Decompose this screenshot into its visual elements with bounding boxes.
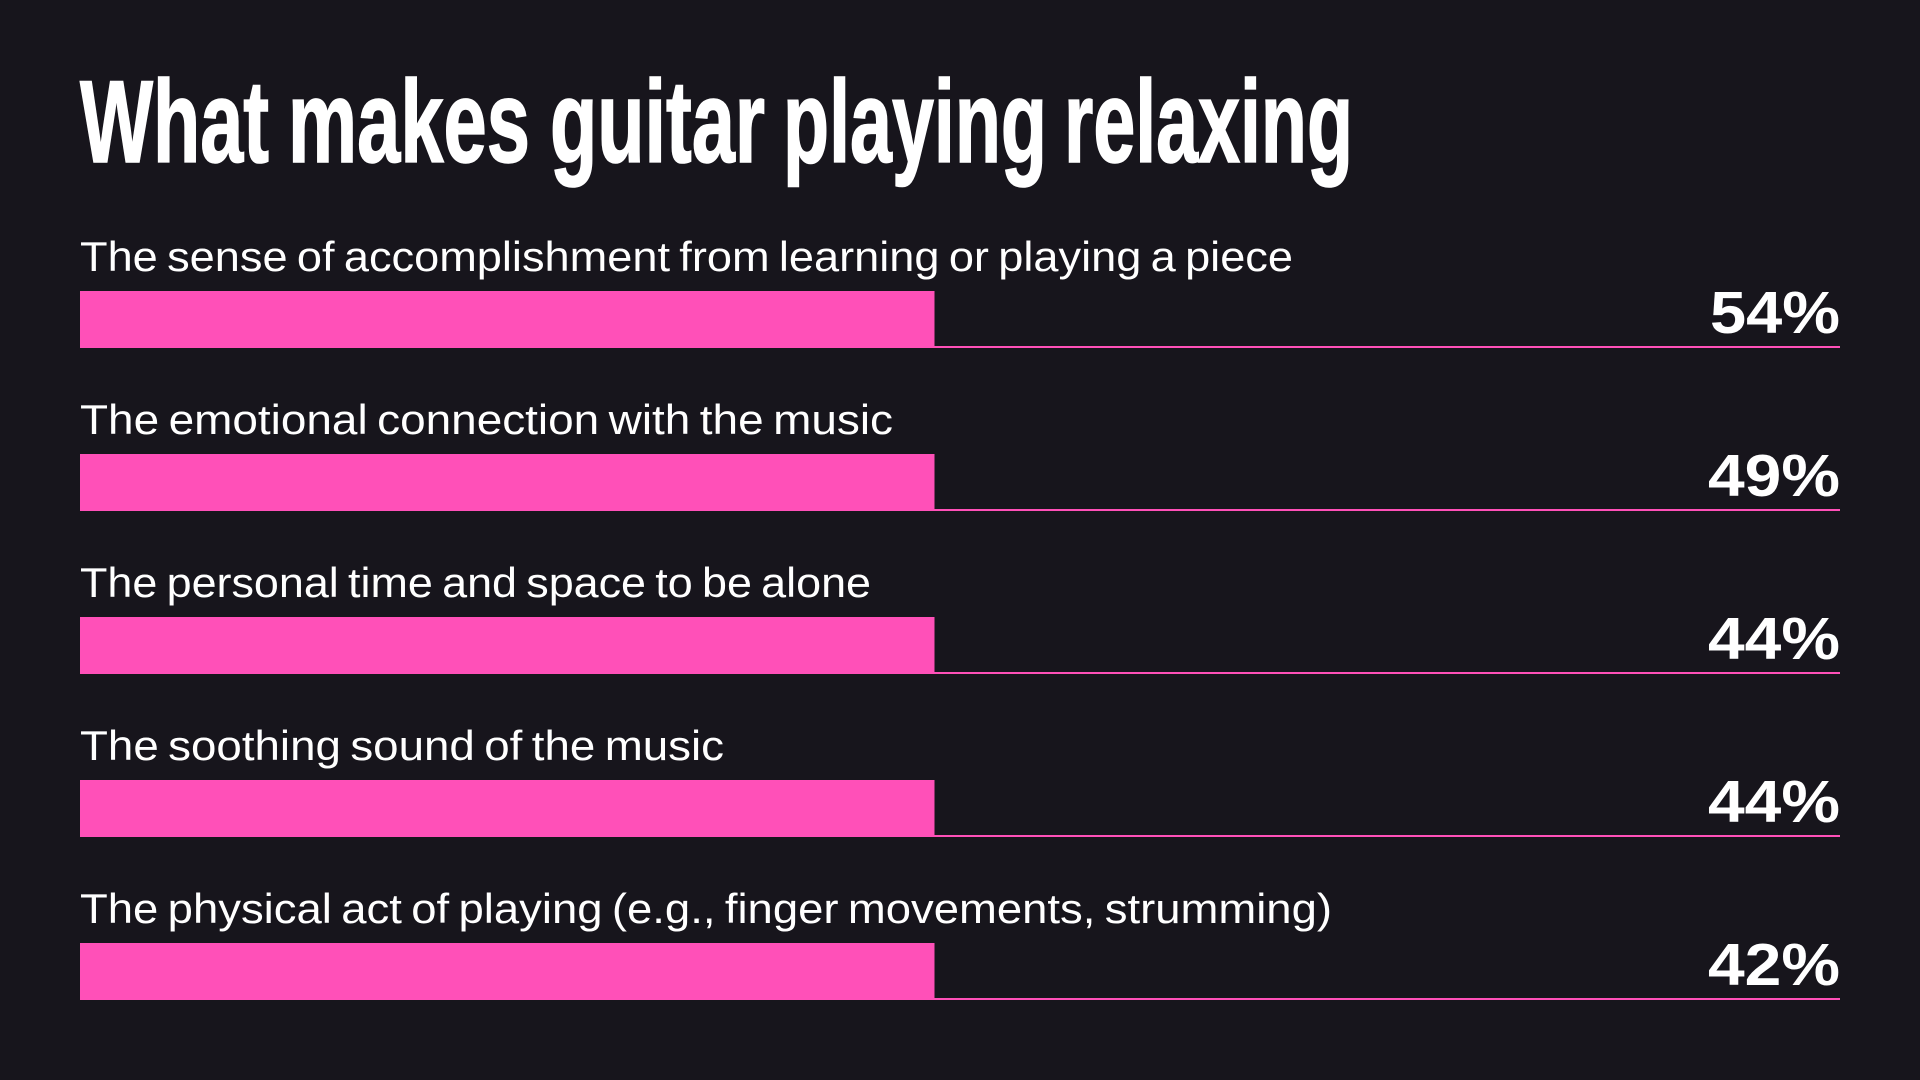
title: guitar bbox=[550, 56, 765, 187]
title: What bbox=[80, 56, 269, 187]
baseline rule bbox=[80, 346, 1840, 348]
title: relaxing bbox=[1064, 56, 1353, 187]
baseline rule bbox=[80, 998, 1840, 1000]
title bbox=[80, 56, 1353, 187]
title: makes bbox=[288, 56, 530, 187]
label: soothing sound: The soothing sound of the music bbox=[80, 722, 724, 769]
bar bbox=[80, 454, 934, 511]
label: physical act of playing: The physical act of playing (e.g., finger movements, strumming) bbox=[80, 885, 1332, 932]
value: 42%: 42% bbox=[1708, 932, 1840, 998]
baseline rule bbox=[80, 509, 1840, 511]
value: 54%: 54% bbox=[1710, 280, 1840, 346]
value: 44%: 44% bbox=[1708, 606, 1840, 672]
row: soothing sound bbox=[80, 722, 1840, 837]
label: emotional connection: The emotional connection with the music bbox=[80, 396, 893, 443]
label: personal time and space: The personal time and space to be alone bbox=[80, 559, 871, 606]
bar bbox=[80, 943, 934, 1000]
value: 44%: 44% bbox=[1708, 769, 1840, 835]
bar bbox=[80, 780, 934, 837]
bar bbox=[80, 617, 934, 674]
label: sense of accomplishment: The sense of accomplishment from learning or playing a piece bbox=[80, 233, 1293, 280]
title: playing bbox=[783, 56, 1047, 187]
value: 49%: 49% bbox=[1708, 443, 1840, 509]
row: emotional connection bbox=[80, 396, 1840, 511]
baseline rule bbox=[80, 672, 1840, 674]
bar bbox=[80, 291, 934, 348]
row: personal time and space bbox=[80, 559, 1840, 674]
row: sense of accomplishment bbox=[80, 233, 1840, 348]
baseline rule bbox=[80, 835, 1840, 837]
row: physical act of playing bbox=[80, 885, 1840, 1000]
